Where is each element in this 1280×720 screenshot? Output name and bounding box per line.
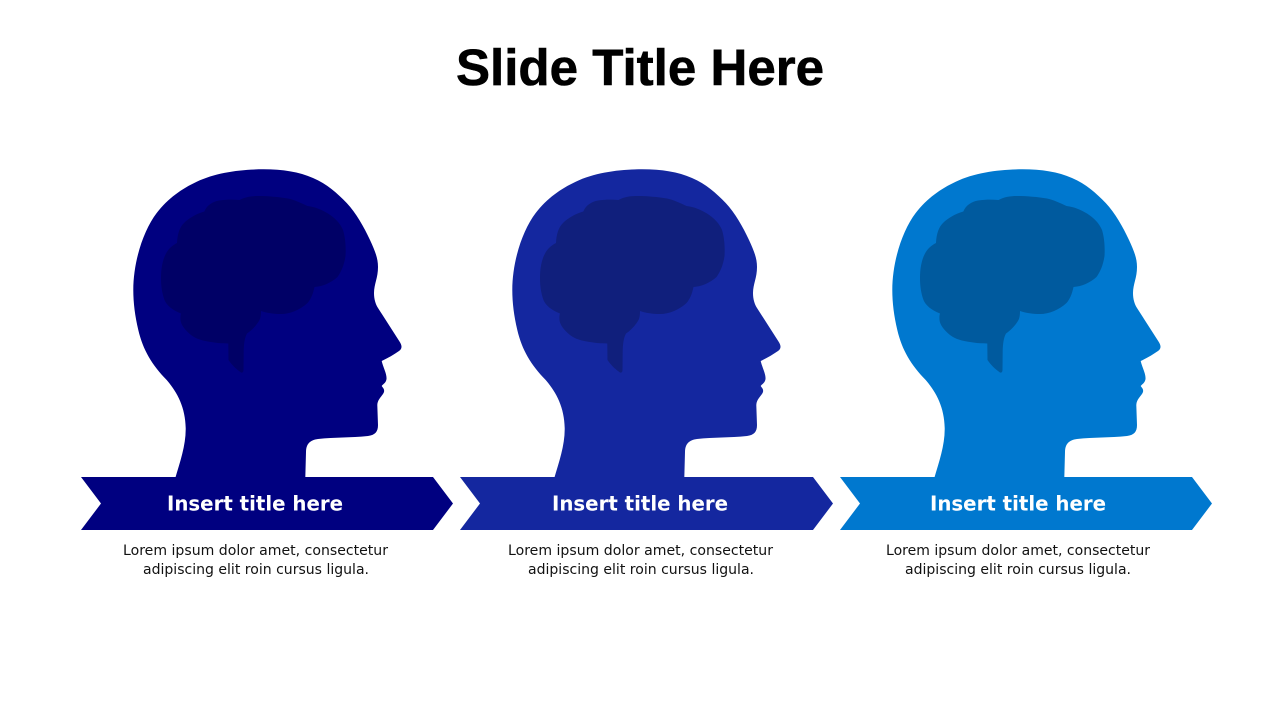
banner heading 3: Insert title here <box>930 492 1106 516</box>
description 3: adipiscing elit roin cursus ligula. <box>905 562 1131 578</box>
panel: column 3 <box>840 169 1212 578</box>
description 1: Lorem ipsum dolor amet, consectetur <box>123 543 388 559</box>
banner heading 2: Insert title here <box>552 492 728 516</box>
icon: head silhouette 1 <box>133 169 402 478</box>
arrow banner 1 <box>81 477 453 530</box>
icon: brain 1 <box>161 196 346 373</box>
description 2: Lorem ipsum dolor amet, consectetur <box>508 543 773 559</box>
banner heading 1: Insert title here <box>167 492 343 516</box>
panel: column 1 <box>81 169 453 578</box>
icon: head silhouette 2 <box>512 169 781 478</box>
description 3: Lorem ipsum dolor amet, consectetur <box>886 543 1150 559</box>
icon: brain 2 <box>540 196 725 373</box>
description 1: adipiscing elit roin cursus ligula. <box>143 562 369 578</box>
title: Slide Title Here <box>456 39 824 96</box>
description 2: adipiscing elit roin cursus ligula. <box>528 562 754 578</box>
description 3 <box>886 543 1150 578</box>
panel: column 2 <box>460 169 833 578</box>
description 2 <box>508 543 773 578</box>
arrow banner 2 <box>460 477 833 530</box>
description 1 <box>123 543 388 578</box>
arrow banner 3 <box>840 477 1212 530</box>
icon: brain 3 <box>920 196 1105 373</box>
icon: head silhouette 3 <box>892 169 1161 478</box>
